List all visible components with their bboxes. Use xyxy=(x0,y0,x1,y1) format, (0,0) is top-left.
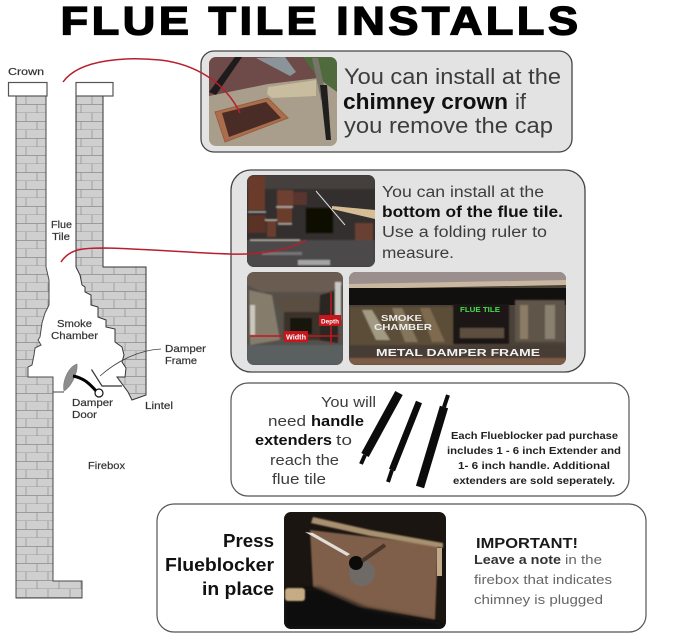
text: crown instructions: you remove the cap xyxy=(344,113,553,138)
text: flue bottom instructions xyxy=(382,184,563,262)
text: important note: firebox that indicates xyxy=(474,573,612,587)
text: press flueblocker: Press xyxy=(223,531,274,551)
text: package contents: 1- 6 inch handle. Additional xyxy=(458,460,610,472)
red callout line: flue tile xyxy=(61,240,306,262)
text: handle extenders: need xyxy=(268,413,306,430)
text: crown instructions: You can install at the xyxy=(344,64,561,89)
leader line: damper frame xyxy=(100,349,161,376)
text: flue bottom instructions: measure. xyxy=(382,245,454,262)
label: flue tile: Tile xyxy=(52,231,70,243)
photo labels: FLUE TILE xyxy=(460,305,500,314)
damper frame xyxy=(92,370,122,386)
label: flue tile xyxy=(51,219,72,243)
photo: smoke chamber and damper frame xyxy=(349,272,566,365)
text: handle extenders xyxy=(255,394,376,488)
text: important note: IMPORTANT! xyxy=(476,536,578,552)
measurement marks: Depth xyxy=(321,318,339,326)
text: handle extenders: to xyxy=(336,432,352,449)
text: package contents: Each Flueblocker pad purchase xyxy=(451,430,618,442)
photo labels: CHAMBER xyxy=(374,322,432,332)
crown caps xyxy=(8,82,113,96)
text: flue bottom instructions: You can install at the xyxy=(382,184,544,201)
text: crown instructions: if xyxy=(515,89,527,114)
label: damper frame: Damper xyxy=(165,343,207,355)
right chimney wall xyxy=(76,96,146,400)
photo: width and depth measurement xyxy=(247,272,343,365)
label: lintel: Lintel xyxy=(145,400,173,412)
photo labels xyxy=(374,305,540,359)
text: package contents xyxy=(447,430,621,487)
label: damper door xyxy=(72,397,114,421)
measurement marks xyxy=(250,292,341,345)
label: crown: Crown xyxy=(8,66,44,78)
label: damper frame: Frame xyxy=(165,355,197,367)
measurement marks: Width xyxy=(286,334,306,342)
label: smoke chamber xyxy=(51,318,99,342)
red callout line: crown xyxy=(63,59,240,113)
text: crown instructions: chimney crown xyxy=(343,89,508,114)
text: handle extenders: handle xyxy=(311,413,364,430)
photo labels: METAL DAMPER FRAME xyxy=(376,347,540,359)
text: important note xyxy=(474,536,612,607)
photo: flueblocker pad pressed in flue xyxy=(284,512,446,629)
label: smoke chamber: Smoke xyxy=(57,318,92,330)
text: handle extenders: You will xyxy=(321,394,376,411)
photo labels: SMOKE xyxy=(381,313,422,323)
panel: bottom of flue tile xyxy=(231,170,585,372)
text: important note: Leave a note xyxy=(474,553,561,567)
text: important note: in the xyxy=(565,553,602,567)
label: firebox: Firebox xyxy=(88,460,126,472)
panel: handle extenders xyxy=(231,383,629,496)
damper door xyxy=(53,364,103,397)
text: handle extenders: flue tile xyxy=(272,471,326,488)
panel: press flueblocker xyxy=(157,504,646,632)
text: press flueblocker: Flueblocker xyxy=(165,555,274,575)
label: damper door: Damper xyxy=(72,397,114,409)
title: FLUE TILE INSTALLS xyxy=(60,0,582,44)
text: important note: chimney is plugged xyxy=(474,593,603,607)
text: flue bottom instructions: bottom of the flue tile. xyxy=(382,204,563,221)
text: press flueblocker xyxy=(165,531,274,599)
text: flue bottom instructions: Use a folding ruler to xyxy=(382,224,547,241)
photo: looking up at flue bottom xyxy=(247,175,375,267)
text: handle extenders: reach the xyxy=(270,452,339,469)
label: flue tile: Flue xyxy=(51,219,72,231)
label: damper door: Door xyxy=(72,409,98,421)
left chimney wall xyxy=(16,96,82,598)
chimney diagram xyxy=(8,66,207,598)
panel: chimney crown xyxy=(201,51,572,152)
text: crown instructions xyxy=(343,64,561,138)
text: package contents: extenders are sold seperately. xyxy=(453,475,615,487)
extender rods xyxy=(361,393,448,487)
label: smoke chamber: Chamber xyxy=(51,330,99,342)
text: press flueblocker: in place xyxy=(202,579,274,599)
photo: chimney crown flue opening xyxy=(209,57,337,146)
text: package contents: includes 1 - 6 inch Extender and xyxy=(447,445,621,457)
label: damper frame xyxy=(165,343,207,367)
text: handle extenders: extenders xyxy=(255,432,332,449)
